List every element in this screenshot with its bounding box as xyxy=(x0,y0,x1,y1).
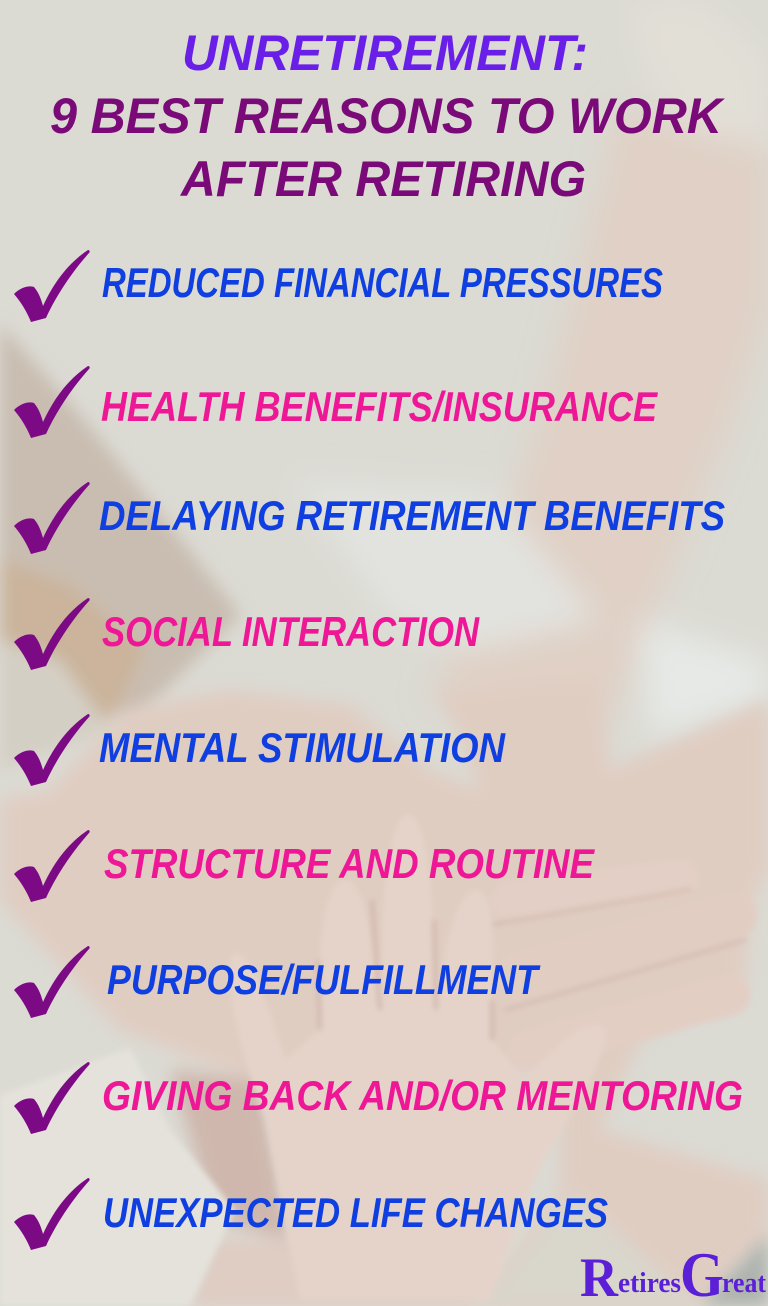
background: upper arm and soft areas xyxy=(290,0,768,740)
title: UNRETIREMENT: xyxy=(182,25,588,81)
reasons list xyxy=(99,259,743,1236)
reasons list: MENTAL STIMULATION xyxy=(99,724,506,771)
reasons list: HEALTH BENEFITS/INSURANCE xyxy=(101,383,659,430)
background: right hand fingers xyxy=(490,878,745,1050)
reasons list: UNEXPECTED LIFE CHANGES xyxy=(103,1189,608,1236)
title: AFTER RETIRING xyxy=(179,151,586,207)
background: central raised hand xyxy=(231,815,606,1300)
reasons list: SOCIAL INTERACTION xyxy=(102,608,480,655)
logo: RetiresGreat xyxy=(580,1239,767,1306)
background: white knit sleeve xyxy=(0,1048,235,1306)
reasons list: STRUCTURE AND ROUTINE xyxy=(104,840,596,887)
background: bottom right grey xyxy=(480,1190,768,1306)
checkmark icons xyxy=(14,250,90,1250)
logo: RetiresGreat: etires xyxy=(618,1268,681,1299)
background: hands mass xyxy=(0,680,768,1306)
title xyxy=(50,25,726,207)
title: 9 BEST REASONS TO WORK xyxy=(50,88,726,144)
background: dark sleeve and cuff xyxy=(0,325,240,770)
reasons list: PURPOSE/FULFILLMENT xyxy=(107,956,541,1003)
